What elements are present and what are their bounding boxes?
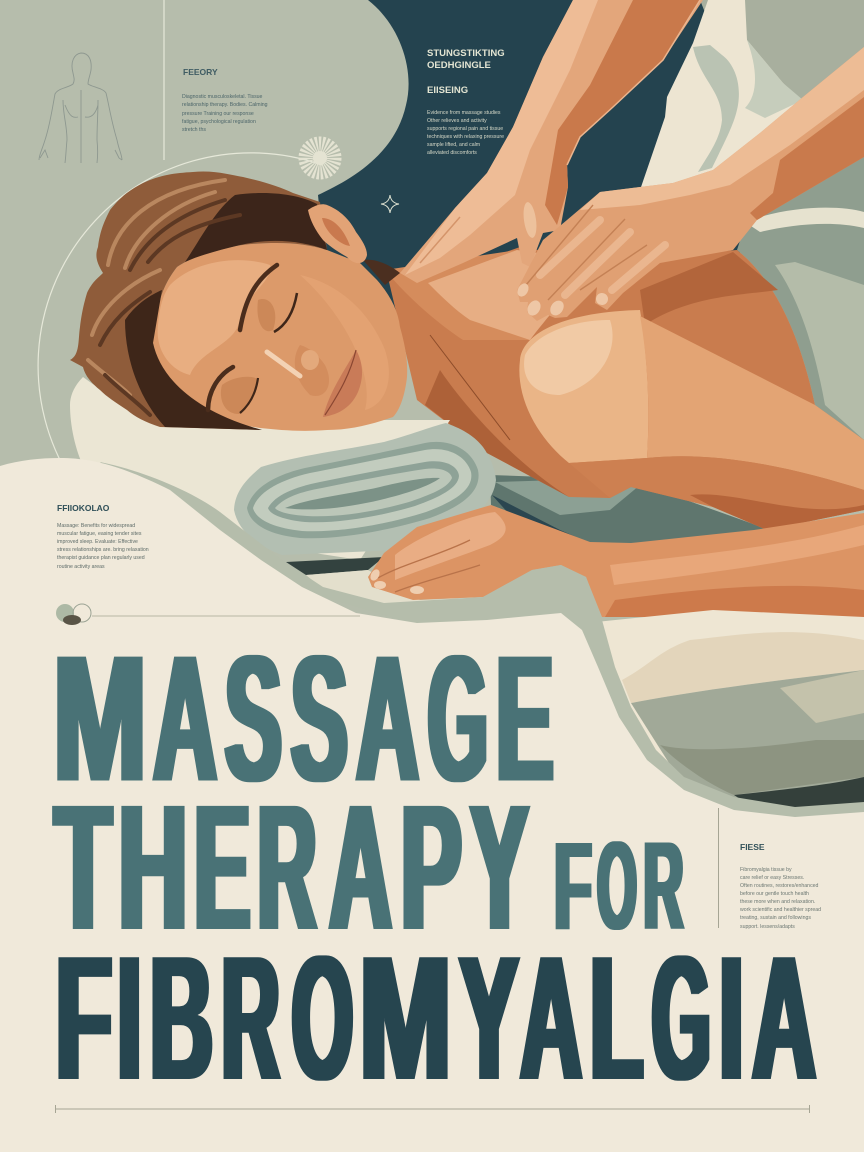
title line: massage: G: [428, 618, 488, 820]
bottom rule: [55, 1105, 810, 1113]
title line: therapy: H: [118, 767, 188, 967]
vertical line: [163, 0, 165, 160]
text block: fiese: care relief or easy Stresses.: [740, 875, 804, 881]
title line: therapy: E: [194, 767, 250, 967]
title line: fibromyalgia: O: [292, 919, 353, 1117]
title line: massage: A: [154, 618, 217, 820]
rolled towel: [234, 423, 496, 555]
divider line: [92, 615, 360, 617]
text block: fiese: Often routines, restores/enhanced: [740, 883, 819, 889]
sage sheet right side: [737, 150, 864, 445]
text block: theory: [182, 67, 268, 133]
text block: fibromyalgia note: Massage: Benefits for widespread: [57, 523, 135, 529]
text block: theory: FEEORY: [183, 67, 218, 77]
text block: fibromyalgia note: therapist guidance plan regularly used: [57, 555, 145, 561]
icon: white flower: [307, 145, 333, 171]
cream panel: [0, 458, 864, 1152]
text block: fibromyalgia note: stress relationships are. bring relaxation: [57, 547, 149, 553]
cream bed sheet top right: [640, 0, 810, 220]
head and hair: [70, 172, 407, 431]
text block: strengthening: OEDHGINGLE: [427, 60, 491, 71]
title line: fibromyalgia: B: [150, 919, 213, 1117]
title line: fibromyalgia: R: [222, 919, 280, 1117]
text block: fiese: support. lessens/adapts: [740, 924, 795, 930]
title: [53, 618, 816, 1117]
icon: body outline: [39, 53, 122, 163]
text block: fiese: [740, 842, 821, 930]
text block: strengthening: Other relieves and activity: [427, 118, 487, 124]
title line: massage: S: [291, 618, 348, 820]
text block: strengthening: EIISEING: [427, 85, 468, 96]
text block: fiese: these more when and relaxation.: [740, 899, 815, 905]
title line: therapy: A: [330, 767, 392, 967]
text block: strengthening: techniques with relaxing pressure: [427, 134, 504, 140]
sage cloth top right: [700, 0, 864, 150]
text block: strengthening: Evidence from massage studies: [427, 110, 501, 116]
shoulder highlight: [519, 310, 648, 463]
title line: fibromyalgia: I: [720, 919, 743, 1117]
dark strip under towel: [286, 557, 384, 575]
text block: fibromyalgia note: muscular fatigue, easing tender sites: [57, 531, 142, 537]
text block: theory: stretch ths: [182, 127, 206, 133]
sage wave band: [100, 462, 864, 830]
text block: theory: relationship therapy. Bodies. Calming: [182, 102, 268, 108]
title word: for: O: [597, 817, 637, 956]
sheet under hand: [306, 570, 484, 615]
title: Y: [470, 767, 528, 967]
text block: fiese: Fibromyalgia tissue by: [740, 867, 792, 873]
top arm and hand: [400, 0, 703, 283]
title line: massage: A: [356, 618, 419, 820]
back of the body: [385, 247, 864, 530]
text block: fibromyalgia note: improved sleep. Evaluate: Effective: [57, 539, 138, 545]
title line: fibromyalgia: F: [56, 919, 112, 1117]
title line: therapy: R: [258, 767, 316, 967]
text block: fiese: FIESE: [740, 842, 765, 852]
text block: strengthening: sample lifted, and calm: [427, 142, 480, 148]
dark teal panel: [318, 0, 740, 320]
title line: fibromyalgia: L: [590, 919, 643, 1117]
text block: strengthening: STUNGSTIKTING: [427, 48, 505, 59]
title word: for: F: [554, 817, 592, 956]
side arm and hand: [515, 47, 864, 321]
text block: fiese: work scientific and healthier spread: [740, 907, 821, 913]
title line: fibromyalgia: M: [359, 919, 452, 1117]
text block: fibromyalgia note: FFIIOKOLAO: [57, 503, 110, 513]
title line: fibromyalgia: G: [652, 919, 710, 1117]
text block: fibromyalgia note: routine activity areas: [57, 564, 105, 570]
vertical rule: [718, 808, 720, 928]
title line: massage: S: [225, 618, 282, 820]
text block: strengthening: [427, 48, 505, 156]
icon: sparkle star: [381, 195, 399, 213]
lower arm and hand: [368, 505, 864, 617]
white pillow: [70, 377, 450, 560]
dark sheet under body: [490, 475, 770, 545]
decorative arc around head: [38, 153, 322, 478]
title line: therapy: P: [401, 767, 462, 967]
icon: overlapping circles: [56, 604, 91, 625]
text block: theory: Diagnostic musculoskeletal. Tissue: [182, 94, 263, 100]
title line: fibromyalgia: Y: [460, 919, 518, 1117]
lower right pillow: [596, 610, 864, 812]
title: E: [496, 618, 553, 820]
text block: strengthening: alleviated discomforts: [427, 150, 477, 156]
text block: fibromyalgia note: [57, 503, 149, 570]
text block: theory: pressure Training our response: [182, 111, 254, 117]
title line: massage: M: [53, 618, 147, 820]
title line: therapy: T: [55, 767, 111, 967]
text block: fiese: treating, sustain and followings: [740, 915, 811, 921]
title: R: [644, 817, 684, 956]
title line: fibromyalgia: A: [520, 919, 582, 1117]
text block: theory: fatigue, psychological regulation: [182, 119, 256, 125]
text block: strengthening: supports regional pain and tissue: [427, 126, 503, 132]
title line: fibromyalgia: I: [118, 919, 141, 1117]
text block: fiese: before our gentle touch health: [740, 891, 809, 897]
